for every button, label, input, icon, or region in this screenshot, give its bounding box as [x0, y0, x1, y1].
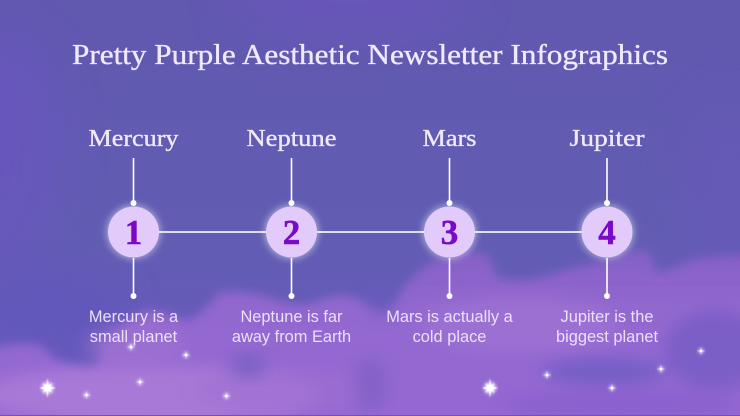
stars	[40, 343, 705, 400]
step 1: Mercury: Mercury	[88, 126, 178, 152]
step 3: Mars	[386, 126, 514, 346]
step 1: Mercury: small planet	[90, 328, 178, 346]
step 4: Jupiter	[556, 126, 658, 346]
step 4: Jupiter: biggest planet	[556, 328, 658, 346]
step 3: Mars: Mars is actually a	[386, 308, 514, 326]
step 2: Neptune: away from Earth	[232, 328, 351, 346]
step 4: Jupiter: 4	[598, 213, 616, 252]
title: Pretty Purple Aesthetic Newsletter Infographics	[72, 40, 668, 71]
step 1: Mercury	[88, 126, 179, 346]
horizontal timeline connector	[133, 231, 607, 233]
step 1: Mercury: 1	[125, 213, 142, 252]
step 2: Neptune	[232, 126, 351, 346]
step 2: Neptune: Neptune	[246, 126, 336, 152]
step 4: Jupiter: Jupiter	[570, 126, 644, 152]
step 1: Mercury: Mercury is a	[89, 308, 179, 326]
step 3: Mars: cold place	[413, 328, 486, 346]
step 3: Mars: Mars	[422, 126, 476, 152]
step 2: Neptune: Neptune is far	[240, 308, 343, 326]
step 3: Mars: 3	[441, 213, 458, 252]
step 4: Jupiter: Jupiter is the	[561, 308, 653, 326]
step 2: Neptune: 2	[283, 213, 300, 252]
